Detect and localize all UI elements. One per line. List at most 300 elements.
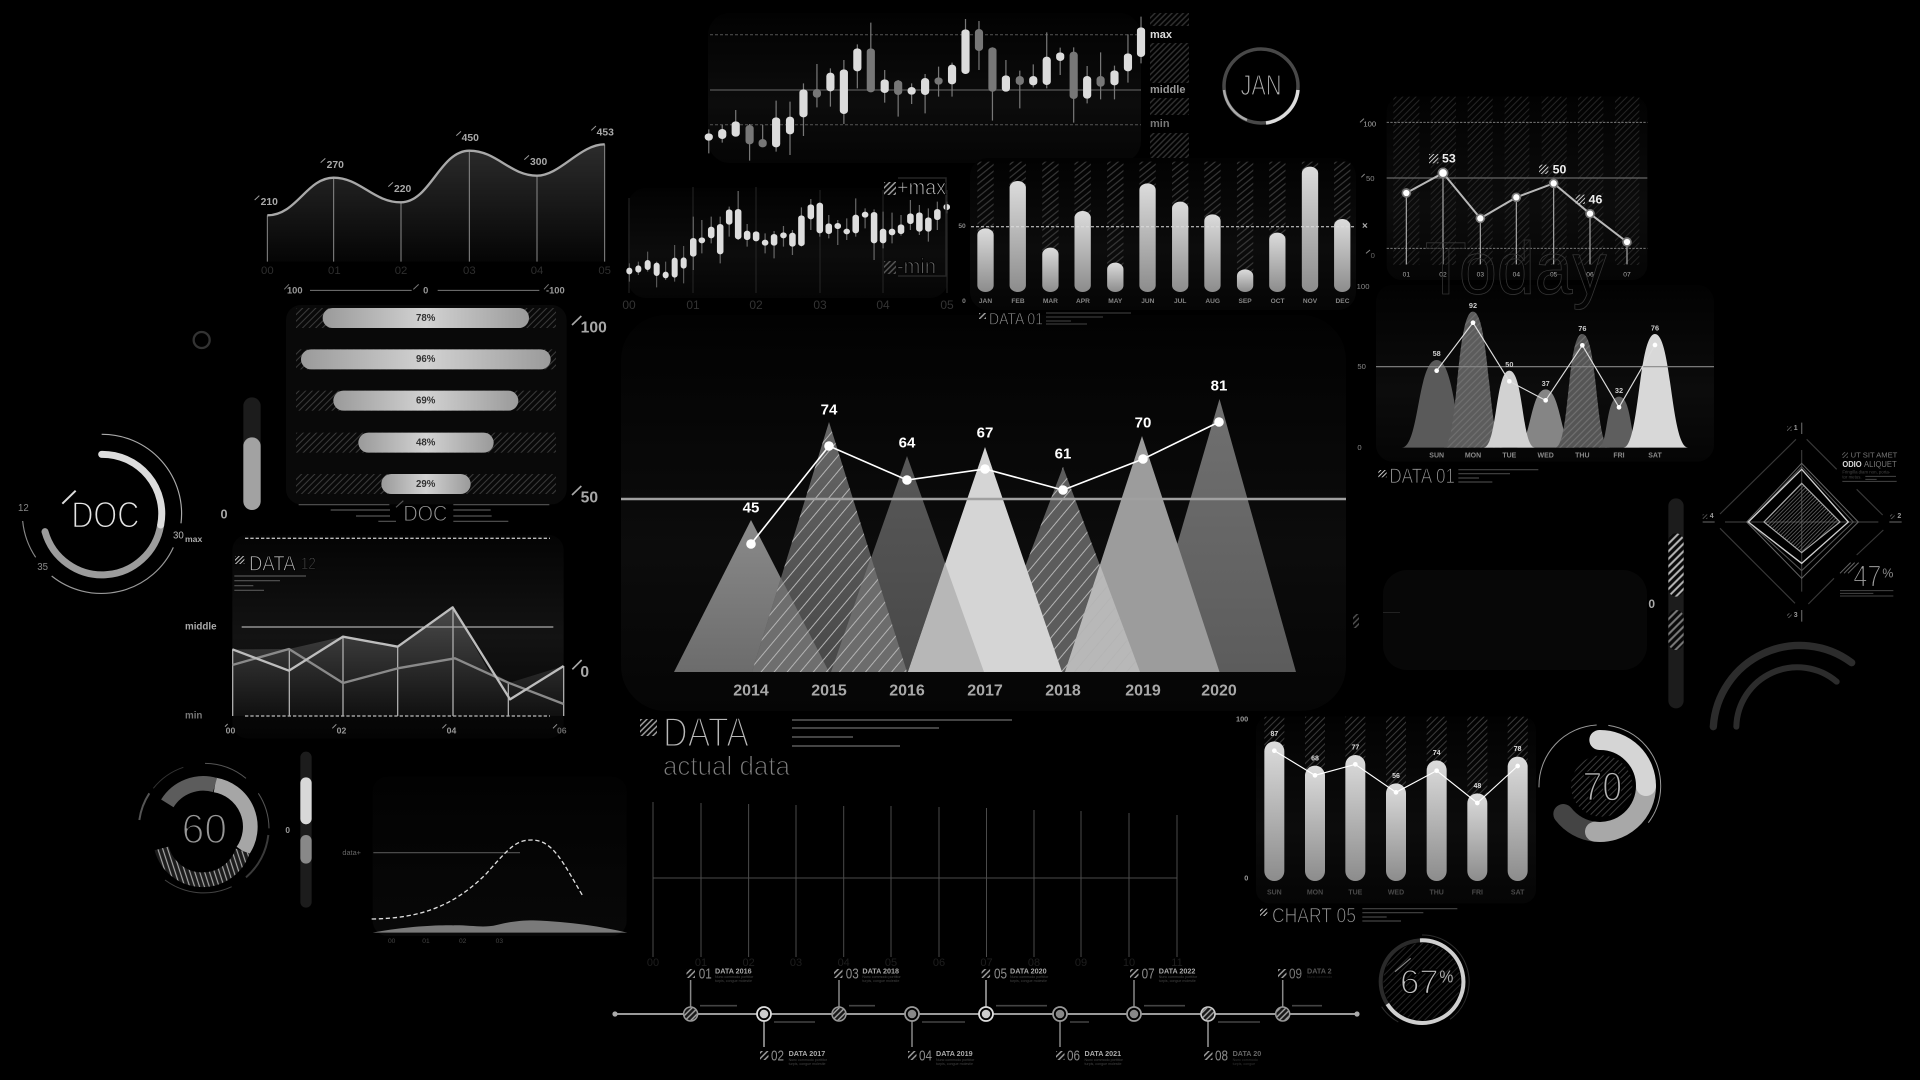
title: DOC bbox=[299, 501, 549, 526]
x axis labels: 04 bbox=[876, 298, 890, 312]
dashed bounds and midline bbox=[245, 538, 550, 716]
value labels bbox=[743, 378, 1227, 516]
zero marker bbox=[572, 660, 589, 681]
milestone 02 bbox=[757, 1007, 828, 1066]
day labels: WED bbox=[1538, 452, 1554, 459]
value labels bbox=[255, 126, 614, 208]
y axis labels: 50 bbox=[1357, 362, 1366, 371]
axis labels: DEC bbox=[1336, 298, 1350, 305]
value labels: 32 bbox=[1615, 386, 1623, 395]
value labels: 81 bbox=[1211, 378, 1227, 394]
title: DATA 12 bbox=[234, 551, 316, 590]
value labels: 61 bbox=[1055, 446, 1071, 462]
axis ticks: 2 bbox=[1897, 513, 1901, 520]
value labels: 74 bbox=[1433, 750, 1441, 757]
day labels: SUN bbox=[1267, 889, 1282, 896]
data polygons bbox=[1747, 463, 1858, 578]
title: CHART 05: CHART 05 bbox=[1272, 904, 1356, 928]
tick labels: max bbox=[185, 534, 203, 544]
axis ticks: 3 bbox=[1794, 612, 1798, 619]
x axis labels bbox=[622, 298, 954, 312]
day labels: TUE bbox=[1502, 452, 1517, 459]
timeline axis bbox=[612, 1006, 1360, 1022]
outer diamond and axes bbox=[1720, 439, 1883, 604]
panel: horizontal percent bars bbox=[243, 305, 607, 526]
axis labels: 05 bbox=[885, 957, 897, 969]
milestone 04 bbox=[905, 1007, 975, 1066]
milestone 07 bbox=[1127, 966, 1198, 1021]
x axis labels: 02 bbox=[395, 265, 407, 277]
scale markers 100 and 50: 50 bbox=[581, 489, 598, 506]
progress ring bbox=[45, 525, 161, 575]
year labels: 2016 bbox=[889, 682, 925, 700]
day labels: THU bbox=[1575, 452, 1590, 459]
milestone 05: DATA 2020 bbox=[1010, 966, 1047, 976]
center value: 70 bbox=[1583, 764, 1622, 810]
panel: dashed curve chart bbox=[342, 777, 627, 945]
area fill and curve bbox=[267, 144, 605, 262]
value labels: 50 bbox=[1505, 360, 1513, 369]
grid lines bbox=[629, 187, 947, 293]
y axis labels: 0 bbox=[1244, 873, 1248, 882]
reference lines bbox=[710, 35, 1141, 125]
label: middle and min: min bbox=[185, 710, 202, 722]
milestone 06 bbox=[1053, 1007, 1124, 1066]
milestone 01: DATA 2016 bbox=[715, 966, 752, 976]
axis labels: APR bbox=[1076, 298, 1090, 305]
line series bbox=[1272, 748, 1520, 805]
scale markers 100 and 50 bbox=[572, 316, 607, 506]
panel: weekly bell curves bbox=[1357, 282, 1714, 488]
panel: right-centre dim panel bbox=[1353, 570, 1647, 670]
triangles by year bbox=[674, 399, 1296, 672]
milestone 09: Nunc commodo bbox=[1307, 975, 1332, 979]
day labels: SUN bbox=[1429, 452, 1444, 459]
axis labels: 100 bbox=[1363, 119, 1376, 128]
axis labels bbox=[1150, 29, 1185, 130]
axis labels bbox=[647, 957, 1183, 969]
day labels: MON bbox=[1465, 452, 1481, 459]
panel: hatched line chart bbox=[1360, 97, 1647, 280]
axis labels: 06 bbox=[1586, 271, 1594, 278]
year labels: 2017 bbox=[967, 682, 1003, 700]
legend text: UT SIT AMET bbox=[1851, 450, 1898, 459]
area bbox=[373, 920, 627, 933]
value labels: 453 bbox=[597, 127, 614, 138]
midline bbox=[1376, 365, 1714, 368]
milestone 05: 05 bbox=[994, 966, 1007, 982]
milestone 01 bbox=[684, 966, 754, 1021]
day labels: SAT bbox=[1648, 452, 1662, 459]
axis labels: middle bbox=[1150, 84, 1185, 96]
range scale: 0 bbox=[423, 285, 428, 295]
axis ticks: 1 bbox=[1794, 425, 1798, 432]
gauge: 67 percent bbox=[1381, 935, 1469, 1023]
value labels: 210 bbox=[261, 197, 278, 208]
grid lines bbox=[653, 802, 1177, 957]
x axis labels: 04 bbox=[531, 265, 543, 277]
center value: 67 bbox=[1400, 964, 1439, 1002]
milestone 08 bbox=[1201, 1007, 1261, 1066]
axis labels: 08 bbox=[1028, 957, 1040, 969]
small ring bbox=[194, 332, 210, 348]
dashed 50 line bbox=[971, 226, 1354, 228]
hatched centre bbox=[1571, 755, 1632, 817]
range scale: -100 bbox=[546, 285, 565, 295]
dashed curve bbox=[372, 840, 583, 919]
axis labels: MAR bbox=[1043, 298, 1058, 305]
value labels: 450 bbox=[462, 133, 479, 144]
day labels bbox=[1267, 889, 1525, 896]
axis labels: 01 bbox=[422, 938, 430, 945]
milestone 03: turpis, congue molestie bbox=[862, 979, 899, 983]
percent bars bbox=[301, 308, 551, 494]
gauge: JAN: JAN bbox=[1240, 70, 1282, 102]
day labels: MON bbox=[1307, 889, 1323, 896]
legend text: tor metus. bbox=[1842, 474, 1862, 479]
gauge: DOC bbox=[18, 332, 228, 593]
milestone 01: 01 bbox=[699, 966, 712, 982]
label: middle and min: middle bbox=[185, 622, 217, 632]
milestone 09: 09 bbox=[1289, 966, 1302, 982]
panel: monthly bar chart bbox=[958, 158, 1368, 328]
year labels: 2015 bbox=[811, 682, 847, 700]
axis labels: 00 bbox=[388, 938, 396, 945]
bars bbox=[977, 167, 1350, 292]
year labels: 2020 bbox=[1201, 682, 1237, 700]
axis labels: 06 bbox=[557, 726, 567, 736]
percent labels: 29% bbox=[416, 479, 436, 490]
x axis labels: 05 bbox=[940, 298, 954, 312]
47 percent bbox=[1840, 559, 1893, 596]
year labels: 2014 bbox=[733, 682, 769, 700]
milestone 05 bbox=[979, 966, 1049, 1021]
value labels: 58 bbox=[1433, 349, 1441, 358]
panel: area line chart bbox=[255, 126, 614, 295]
milestone 08: Nunc commodo bbox=[1233, 1058, 1258, 1062]
decorative dim arcs bbox=[1713, 645, 1852, 727]
percent labels: 78% bbox=[416, 313, 436, 324]
tick labels: 30 bbox=[173, 530, 184, 541]
milestone 03: Nunc commodo porttitor bbox=[862, 975, 902, 979]
candles left part bbox=[629, 245, 684, 287]
x axis labels bbox=[261, 265, 611, 277]
47 percent: % bbox=[1882, 566, 1893, 580]
radar chart bbox=[1703, 423, 1902, 622]
tick labels: 12 bbox=[18, 503, 29, 514]
day labels: FRI bbox=[1472, 889, 1483, 896]
axis labels: MAY bbox=[1108, 298, 1123, 305]
gauge: JAN bbox=[1224, 49, 1298, 123]
line series with markers bbox=[746, 417, 1224, 549]
value labels: 87 bbox=[1270, 731, 1278, 738]
title: DATA 01: DATA 01 bbox=[989, 310, 1043, 328]
candles right part bbox=[693, 191, 947, 270]
milestone 06: DATA 2021 bbox=[1084, 1049, 1121, 1058]
timeline bbox=[612, 966, 1360, 1066]
legend text: Fringilla diam non, porta- bbox=[1842, 469, 1891, 474]
y axis labels bbox=[1357, 282, 1369, 452]
max/min legend: -min bbox=[897, 256, 936, 278]
heading: DATA bbox=[663, 708, 749, 756]
value labels: 56 bbox=[1392, 773, 1400, 780]
tick labels bbox=[18, 503, 203, 573]
value labels: 220 bbox=[394, 184, 411, 195]
day labels: SAT bbox=[1511, 889, 1525, 896]
milestone 04: DATA 2019 bbox=[936, 1049, 973, 1058]
value labels: 70 bbox=[1135, 414, 1151, 432]
value labels: 48 bbox=[1473, 783, 1481, 790]
axis labels: 50 bbox=[958, 223, 966, 230]
axis labels: 10 bbox=[1123, 957, 1135, 969]
title: DATA 01: DATA 01 bbox=[1389, 464, 1455, 488]
year labels: 2018 bbox=[1045, 682, 1081, 700]
milestone 02: DATA 2017 bbox=[789, 1049, 825, 1058]
axis ticks bbox=[1703, 423, 1902, 622]
hatch icon bbox=[640, 719, 657, 736]
axis labels: 09 bbox=[1075, 957, 1087, 969]
line series bbox=[1402, 168, 1631, 246]
slider: bottom-left bbox=[285, 752, 312, 908]
gauge: 70 bbox=[1539, 725, 1661, 832]
y axis labels bbox=[1236, 714, 1248, 882]
milestone 06: turpis, congue molestie bbox=[1084, 1062, 1121, 1066]
day labels: WED bbox=[1388, 889, 1404, 896]
milestone 03 bbox=[832, 966, 902, 1021]
center value: 60 bbox=[182, 805, 227, 852]
value labels: 77 bbox=[1351, 744, 1359, 751]
x axis labels: 01 bbox=[328, 265, 341, 277]
bars bbox=[1264, 741, 1528, 881]
hatched columns bbox=[1393, 97, 1639, 265]
axis labels bbox=[958, 223, 1350, 305]
axis labels: min bbox=[1150, 118, 1170, 130]
axis labels: 0 bbox=[962, 298, 966, 305]
axis labels: 01 bbox=[1403, 271, 1410, 278]
value labels bbox=[1270, 731, 1522, 790]
percent labels bbox=[416, 313, 436, 490]
title: CHART 05 bbox=[1260, 904, 1457, 928]
value labels: 78 bbox=[1514, 746, 1522, 753]
47 percent: 47 bbox=[1853, 559, 1881, 593]
milestone 08: 08 bbox=[1215, 1048, 1228, 1064]
x axis labels: 05 bbox=[598, 265, 611, 277]
panel: small candlestick chart bbox=[622, 176, 954, 312]
axis labels: 01 bbox=[695, 957, 707, 969]
scale markers 100 and 50: 100 bbox=[581, 319, 607, 336]
axis labels bbox=[1360, 119, 1631, 278]
label: middle and min bbox=[185, 622, 217, 722]
reference lines bbox=[1387, 122, 1647, 248]
axis ticks: 4 bbox=[1710, 513, 1714, 520]
thin outer arcs bbox=[139, 763, 269, 893]
max/min legend: +max bbox=[897, 176, 946, 200]
value labels: 300 bbox=[530, 157, 547, 168]
slider: right: 0 bbox=[1648, 597, 1655, 611]
hatched backgrounds bbox=[1264, 717, 1528, 797]
thin ring bbox=[1539, 725, 1661, 823]
hatched bar backgrounds bbox=[977, 162, 1350, 275]
zero marker: 0 bbox=[580, 664, 589, 681]
center value: % bbox=[1439, 967, 1453, 987]
value labels: 67 bbox=[977, 424, 993, 442]
milestone 02: turpis, congue molestie bbox=[789, 1062, 826, 1066]
axis labels: max bbox=[1150, 29, 1173, 41]
callouts bbox=[1429, 152, 1603, 206]
axis labels bbox=[388, 938, 503, 945]
value labels: 68 bbox=[1311, 755, 1319, 762]
vertical slider bbox=[243, 397, 261, 510]
percent labels: 96% bbox=[416, 354, 436, 365]
callouts: 53 bbox=[1442, 152, 1456, 166]
center value bbox=[1395, 958, 1453, 1002]
title block: DATA actual data bbox=[640, 708, 1012, 781]
milestone 03: DATA 2018 bbox=[862, 966, 899, 976]
line series bbox=[1434, 320, 1657, 410]
axis labels: FEB bbox=[1011, 298, 1025, 305]
title: DATA 01 bbox=[1378, 464, 1538, 488]
subheading: actual data bbox=[663, 751, 791, 781]
axis labels: JUL bbox=[1174, 298, 1186, 305]
year labels: 2019 bbox=[1125, 682, 1161, 700]
axis labels: 0 bbox=[1371, 251, 1375, 260]
milestone 04: 04 bbox=[919, 1048, 932, 1064]
milestone 09 bbox=[1276, 966, 1332, 1021]
milestone 08: turpis, congue bbox=[1233, 1062, 1255, 1066]
tick labels: 35 bbox=[37, 562, 48, 573]
day labels: FRI bbox=[1613, 452, 1625, 459]
milestone 04: Nunc commodo porttitor bbox=[936, 1058, 975, 1062]
ring segments bbox=[162, 783, 250, 880]
axis labels: 07 bbox=[980, 957, 993, 969]
axis labels: 02 bbox=[459, 938, 467, 945]
axis labels: 00 bbox=[226, 726, 235, 736]
reference line: data+ bbox=[342, 848, 361, 857]
legend text bbox=[1842, 450, 1898, 481]
axis labels: 02 bbox=[1439, 271, 1447, 278]
value labels: 64 bbox=[899, 434, 916, 452]
axis labels: 04 bbox=[447, 726, 456, 736]
x axis labels: 01 bbox=[686, 298, 700, 312]
area fill bbox=[232, 607, 564, 716]
slider zero: 0 bbox=[220, 507, 228, 521]
axis labels: SEP bbox=[1238, 298, 1252, 305]
vertical droplines bbox=[233, 607, 564, 716]
y axis labels: 100 bbox=[1357, 282, 1369, 291]
milestone 06: Nunc commodo porttitor bbox=[1084, 1058, 1124, 1062]
milestone 07: turpis, congue molestie bbox=[1159, 979, 1196, 983]
hatched tracks bbox=[296, 308, 556, 494]
value labels: 74 bbox=[821, 402, 838, 418]
axis labels: 02 bbox=[337, 726, 346, 736]
axis labels bbox=[225, 724, 567, 736]
axis labels: 03 bbox=[790, 957, 802, 969]
track and progress bbox=[1381, 940, 1463, 1023]
value labels: 76 bbox=[1578, 324, 1586, 333]
x axis labels: 00 bbox=[622, 298, 636, 312]
hatched label column bbox=[1150, 13, 1189, 165]
panel: empty grid bbox=[647, 802, 1183, 969]
day labels: TUE bbox=[1348, 889, 1363, 896]
max/min legend bbox=[884, 176, 946, 278]
axis labels: 07 bbox=[1623, 271, 1631, 278]
ring segments bbox=[1563, 740, 1646, 832]
milestone 07: DATA 2022 bbox=[1159, 966, 1195, 976]
bell shapes bbox=[1402, 312, 1688, 448]
milestone 02: Nunc commodo porttitor bbox=[789, 1058, 828, 1062]
x marker: × bbox=[1362, 220, 1368, 232]
axis labels: JUN bbox=[1141, 298, 1155, 305]
value labels bbox=[1433, 301, 1659, 395]
hatched centre bbox=[1383, 943, 1461, 1020]
y axis labels: 100 bbox=[1236, 714, 1248, 723]
axis labels: AUG bbox=[1205, 298, 1220, 305]
axis labels: 06 bbox=[933, 957, 945, 969]
legend text: ALIQUET bbox=[1864, 460, 1897, 469]
milestone 06: 06 bbox=[1067, 1048, 1080, 1064]
panel: DATA 12 multi-line chart bbox=[225, 535, 589, 738]
milestone 05: Nunc commodo porttitor bbox=[1010, 975, 1049, 979]
axis labels: 11 bbox=[1171, 957, 1183, 969]
axis labels: × bbox=[1362, 221, 1367, 231]
axis labels: OCT bbox=[1271, 298, 1285, 305]
axis labels: 03 bbox=[1477, 271, 1484, 278]
milestone 09: DATA 2 bbox=[1307, 966, 1332, 976]
series lines bbox=[232, 607, 564, 704]
axis labels: 04 bbox=[838, 957, 850, 969]
day labels: THU bbox=[1429, 889, 1444, 896]
center label bbox=[62, 491, 139, 536]
value labels: 76 bbox=[1651, 323, 1659, 332]
title: DATA 12: 12 bbox=[301, 554, 316, 573]
slider: right bbox=[1648, 498, 1684, 708]
axis labels: 02 bbox=[742, 957, 755, 969]
x axis labels: 02 bbox=[749, 298, 763, 312]
milestone 04: turpis, congue molestie bbox=[936, 1062, 973, 1066]
range scale bbox=[284, 284, 565, 295]
faint Today word: Today bbox=[1425, 227, 1607, 310]
legend text: ODIO bbox=[1842, 460, 1862, 469]
day labels bbox=[1429, 452, 1662, 459]
range scale: 100 bbox=[287, 285, 303, 295]
value labels: 45 bbox=[743, 500, 759, 516]
axis labels: 05 bbox=[1550, 271, 1558, 278]
y axis labels: 0 bbox=[1357, 443, 1362, 452]
x axis labels: 03 bbox=[813, 298, 827, 312]
x axis labels: 03 bbox=[463, 265, 476, 277]
milestone 07: Nunc commodo porttitor bbox=[1159, 975, 1198, 979]
thin outer arc bbox=[1382, 935, 1469, 1022]
panel: main triangle chart bbox=[621, 315, 1346, 711]
panel: top candlestick chart bbox=[708, 13, 1189, 165]
value labels: 270 bbox=[327, 160, 344, 171]
candles bbox=[709, 17, 1141, 161]
title: DOC: DOC bbox=[403, 501, 447, 526]
title: DATA 12: DATA bbox=[249, 551, 296, 575]
title: DATA 01 bbox=[979, 310, 1131, 328]
center label: DOC bbox=[71, 494, 139, 536]
year labels bbox=[733, 682, 1237, 700]
panel: weekly bars with line bbox=[1236, 714, 1536, 928]
milestone 01: Nunc commodo porttitor bbox=[715, 975, 754, 979]
x axis labels: 00 bbox=[261, 265, 274, 277]
percent labels: 48% bbox=[416, 437, 436, 448]
value labels: 92 bbox=[1469, 301, 1477, 310]
milestone 03: 03 bbox=[846, 966, 859, 982]
gauge: 60 bbox=[139, 763, 269, 893]
axis labels: 04 bbox=[1513, 271, 1520, 278]
milestone 07: 07 bbox=[1142, 966, 1155, 982]
